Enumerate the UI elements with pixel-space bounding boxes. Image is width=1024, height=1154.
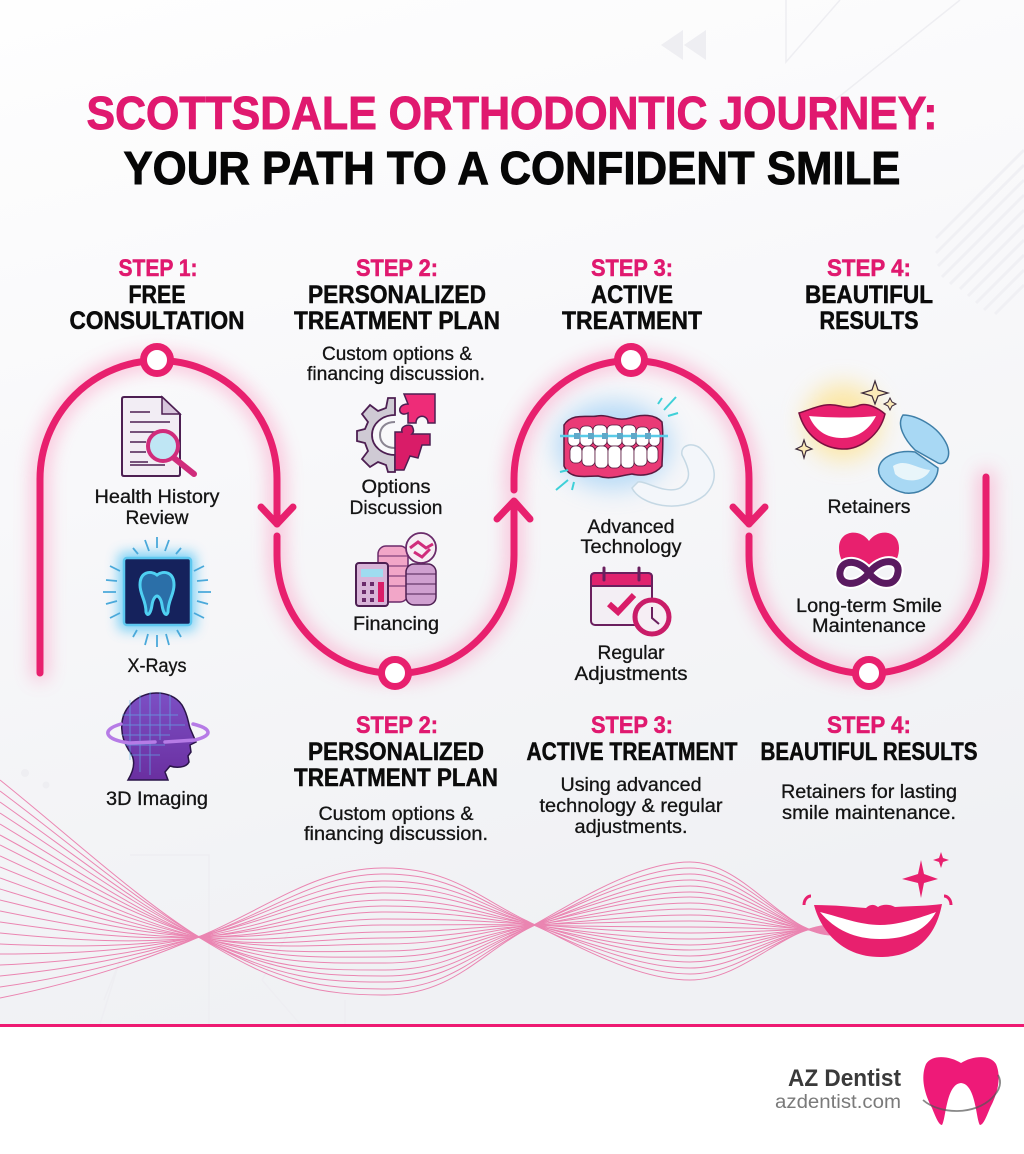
icon: financing calculator and coins (356, 533, 436, 606)
journey path with glow (40, 346, 986, 686)
label: long-term smile maintenance (796, 595, 942, 637)
text block: step 4 below path: Retainers for lasting (781, 781, 957, 803)
title: YOUR PATH TO A CONFIDENT SMILE (124, 142, 900, 194)
footer brand name: AZ Dentist (788, 1065, 901, 1092)
label: options discussion (350, 476, 442, 519)
text block: step 3 below path: technology & regular (540, 795, 723, 817)
label: long-term smile maintenance: Maintenance (812, 615, 926, 637)
text block: step 2 below path: Custom options & (318, 803, 474, 825)
arrow: down to step 2 (261, 507, 293, 524)
icon: options gear and puzzle (357, 394, 435, 472)
heading: step 2 top (294, 255, 500, 385)
icon: heart and infinity (839, 533, 899, 583)
label: advanced technology: Technology (580, 536, 682, 558)
text block: step 3 below path: adjustments. (574, 816, 688, 838)
label: advanced technology (580, 516, 682, 558)
icon: large sparkle (902, 860, 938, 898)
text block: step 4 below path: BEAUTIFUL RESULTS (760, 738, 978, 766)
arrow: down to step 4 (733, 507, 765, 524)
icon: smile with sparkles and retainer case (796, 381, 949, 493)
heading: step 2 top: Custom options & (322, 343, 472, 365)
heading: step 2 top: STEP 2: (356, 255, 438, 282)
node: step 1 (144, 346, 170, 374)
text block: step 2 below path: STEP 2: (356, 712, 438, 739)
text block: step 3 below path: STEP 3: (591, 712, 673, 739)
label: regular adjustments: Adjustments (574, 663, 688, 685)
text block: step 4 below path (760, 712, 978, 824)
label: financing: Financing (353, 613, 439, 635)
icon: tooth logo (923, 1057, 1000, 1125)
icon: smile with sparkles (804, 852, 951, 957)
label: retainers: Retainers (828, 496, 911, 518)
label: regular adjustments (574, 642, 688, 685)
footer panel (0, 1024, 1024, 1154)
arrow: up to step 3 (497, 501, 530, 519)
label: x-rays: X-Rays (128, 655, 187, 677)
heading: step 1: FREE (128, 281, 186, 309)
heading: step 4 top (805, 255, 933, 335)
text block: step 3 below path (526, 712, 738, 838)
heading: step 4 top: RESULTS (820, 307, 918, 335)
label: regular adjustments: Regular (598, 642, 665, 664)
label: health history review: Review (126, 507, 189, 529)
heading: step 2 top: financing discussion. (307, 363, 485, 385)
heading: step 2 top: PERSONALIZED (308, 281, 486, 309)
label: long-term smile maintenance: Long-term Smile (796, 595, 942, 617)
label: health history review: Health History (94, 486, 220, 508)
text block: step 2 below path: financing discussion. (304, 823, 488, 845)
text block: step 3 below path: Using advanced (560, 774, 702, 796)
footer url: azdentist.com (775, 1092, 901, 1113)
icon: 3d imaging head (108, 692, 208, 780)
label: options discussion: Discussion (350, 497, 442, 519)
label: advanced technology: Advanced (588, 516, 674, 538)
icon: braces teeth and aligner (555, 397, 714, 506)
heading: step 3 top: ACTIVE (591, 281, 673, 309)
icon: small sparkle (933, 852, 949, 868)
node: step 4 (856, 660, 882, 686)
heading: step 3 top (562, 255, 702, 335)
wave ribbon (0, 780, 832, 998)
title: SCOTTSDALE ORTHODONTIC JOURNEY: (86, 87, 938, 139)
text block: step 4 below path: smile maintenance. (782, 802, 956, 824)
heading: step 4 top: BEAUTIFUL (805, 281, 933, 309)
heading: step 3 top: TREATMENT (562, 307, 702, 335)
icon: x-ray tooth (103, 537, 211, 647)
heading: step 1: STEP 1: (118, 255, 198, 282)
text block: step 3 below path: ACTIVE TREATMENT (526, 738, 738, 766)
label: options discussion: Options (362, 476, 431, 498)
text block: step 2 below path: PERSONALIZED (308, 738, 484, 766)
label: 3d imaging: 3D Imaging (106, 788, 208, 810)
heading: step 4 top: STEP 4: (827, 255, 911, 282)
title (86, 87, 938, 194)
heading: step 1 (70, 255, 244, 335)
icon: calendar and clock (591, 568, 669, 634)
text block: step 2 below path (294, 712, 498, 845)
icon: health history document (122, 397, 194, 476)
heading: step 2 top: TREATMENT PLAN (294, 307, 500, 335)
heading: step 3 top: STEP 3: (591, 255, 673, 282)
text block: step 2 below path: TREATMENT PLAN (294, 764, 498, 792)
text block: step 4 below path: STEP 4: (827, 712, 911, 739)
node: step 2 (382, 660, 408, 686)
node: step 3 (618, 346, 644, 374)
label: health history review (94, 486, 220, 529)
heading: step 1: CONSULTATION (70, 307, 244, 335)
